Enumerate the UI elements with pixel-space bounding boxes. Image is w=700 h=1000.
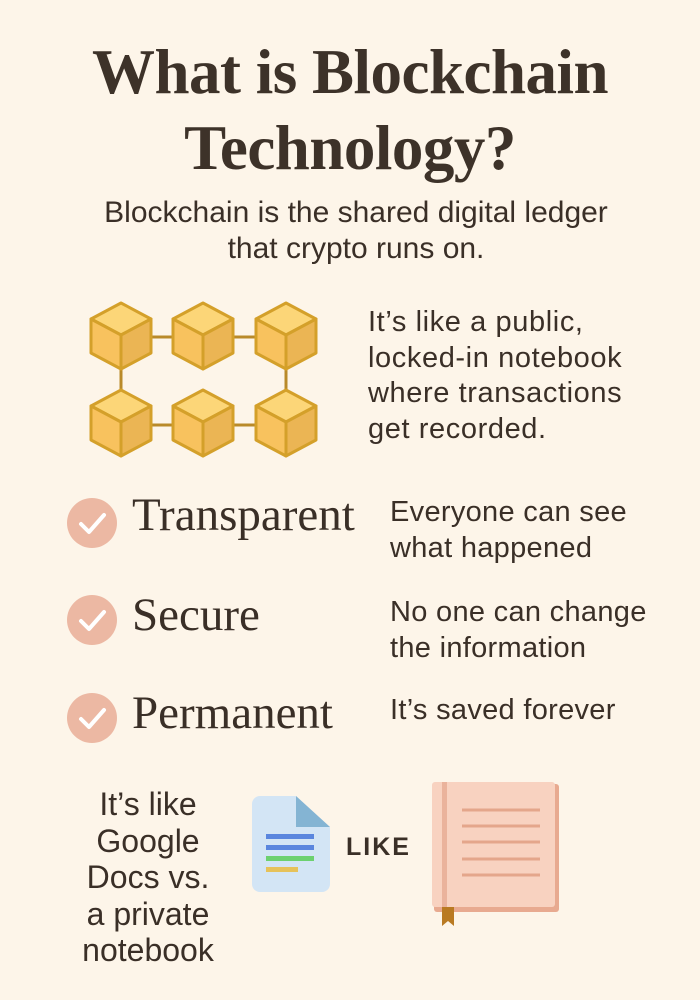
- description: Everyone can see: [390, 496, 627, 528]
- label: Permanent: [132, 687, 333, 739]
- icon: check: [67, 693, 117, 743]
- LIKE label: LIKE: [346, 833, 411, 861]
- description: [390, 496, 627, 564]
- label: Transparent: [132, 489, 355, 541]
- side explanation: [368, 306, 622, 444]
- analogy text: Docs vs.: [87, 859, 209, 895]
- analogy text: Google: [96, 822, 200, 858]
- title: Technology?: [184, 113, 516, 183]
- row: transparent: [67, 489, 627, 564]
- side explanation: get recorded.: [368, 412, 547, 444]
- side explanation: It’s like a public,: [368, 306, 584, 338]
- icon: google doc: [252, 796, 330, 892]
- description: the information: [390, 632, 586, 664]
- description: what happened: [390, 532, 592, 564]
- analogy text: notebook: [82, 932, 214, 968]
- subtitle: [104, 196, 608, 265]
- analogy text: [82, 786, 214, 968]
- subtitle: that crypto runs on.: [228, 232, 484, 265]
- subtitle: Blockchain is the shared digital ledger: [104, 196, 608, 229]
- description: [390, 596, 647, 664]
- row: secure: [67, 589, 647, 664]
- side explanation: where transactions: [368, 377, 622, 409]
- description: It’s saved forever: [390, 694, 616, 726]
- analogy text: a private: [87, 896, 209, 932]
- description: No one can change: [390, 596, 647, 628]
- label: Secure: [132, 589, 260, 641]
- analogy text: It’s like: [99, 786, 197, 822]
- icon: check: [67, 595, 117, 645]
- blockchain cubes illustration: [89, 302, 318, 458]
- icon: check: [67, 498, 117, 548]
- title: [92, 37, 608, 183]
- title: What is Blockchain: [92, 37, 608, 107]
- icon: notebook: [432, 782, 559, 926]
- side explanation: locked-in notebook: [368, 342, 622, 374]
- row: permanent: [67, 687, 616, 743]
